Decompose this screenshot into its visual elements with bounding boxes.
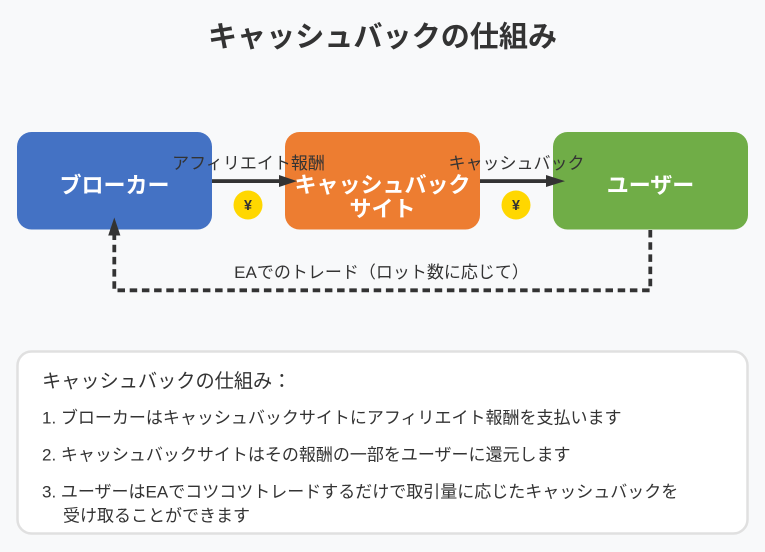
box: cashback site: サイト [349,196,416,222]
box: cashback site: キャッシュバック [294,172,471,198]
panel: explanation [18,352,748,534]
title: キャッシュバックの仕組み [208,20,557,54]
step 3 continued: 受け取ることができます [63,506,250,526]
icon: yen coin 2 [502,190,530,220]
step 2: 2. キャッシュバックサイトはその報酬の一部をユーザーに還元します [42,446,571,464]
step 3: 3. ユーザーはEAでコツコツトレードするだけで取引量に応じたキャッシュバックを [42,482,678,502]
label: EA trades: EAでのトレード（ロット数に応じて） [234,263,529,282]
box: cashback site [285,132,480,230]
step 1: 1. ブローカーはキャッシュバックサイトにアフィリエイト報酬を支払います [42,408,622,428]
arrow: broker to site [212,175,297,187]
icon: yen coin 1: ¥ [244,198,252,214]
panel heading: キャッシュバックの仕組み： [42,370,291,392]
icon: yen coin 1 [234,190,262,220]
label: affiliate commission: アフィリエイト報酬 [172,154,325,173]
arrow: site to user [480,175,565,187]
icon: yen coin 2: ¥ [512,198,520,214]
box: broker [17,132,212,230]
box: broker: ブローカー [59,173,170,198]
arrow: user back to broker (dashed) [108,218,650,290]
box: user [553,132,748,230]
label: cashback: キャッシュバック [448,154,584,173]
box: user: ユーザー [607,173,694,198]
